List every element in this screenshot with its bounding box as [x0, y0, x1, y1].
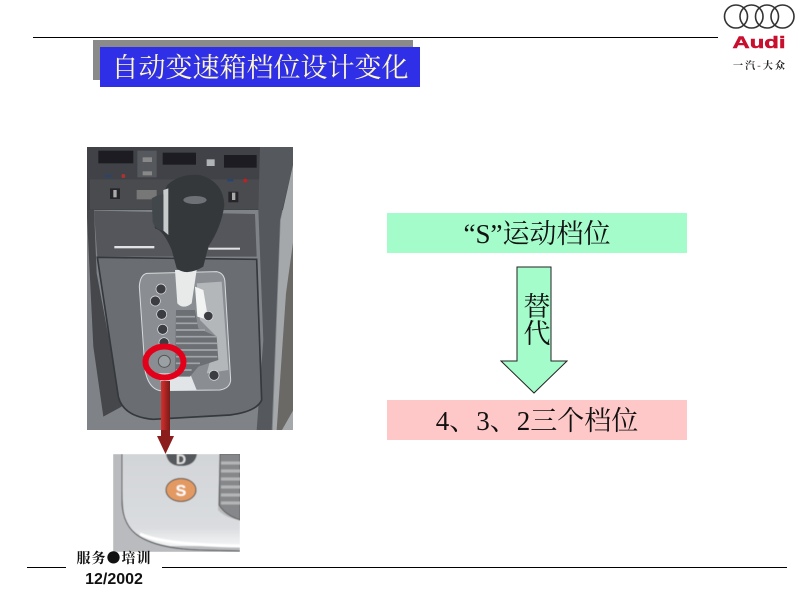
- title: [93, 40, 420, 87]
- red arrow shaft: [161, 381, 170, 430]
- gear dots: [150, 284, 219, 380]
- footer: service training label: 12/2002: [85, 571, 143, 588]
- logo: Audi 一汽-大众: 一汽-大众: [733, 57, 785, 72]
- arrow: replaced by: [500, 266, 568, 394]
- footer: service training label: 服务●培训: [76, 548, 152, 568]
- logo: Audi 一汽-大众: [724, 4, 795, 72]
- left edge: [87, 210, 122, 417]
- footer: service training label: [76, 548, 152, 588]
- knob: [154, 175, 224, 272]
- photo: gear shifter with S position circled: [87, 147, 293, 430]
- logo: Audi 一汽-大众: Audi: [732, 33, 786, 52]
- shaft: [175, 270, 197, 307]
- top console: [87, 147, 293, 210]
- arrow: replaced by: 代: [524, 312, 550, 351]
- ribbed slot: [175, 310, 218, 377]
- panel: 4, 3, 2 positions: [387, 400, 687, 440]
- red circle: [146, 346, 184, 378]
- right side dark and light trim: [257, 147, 293, 430]
- lower console panel: [97, 257, 262, 419]
- panel: S sport position: “S”运动档位: [464, 219, 610, 249]
- panel: S sport position: [387, 213, 687, 253]
- arrow: red pointer to inset: [157, 430, 174, 454]
- metal gate plate: [139, 272, 231, 391]
- inset: S button close-up: S: [176, 483, 187, 500]
- inset: S button close-up: [113, 454, 240, 552]
- arrow: replaced by: 替: [524, 285, 550, 324]
- panel: 4, 3, 2 positions: 4、3、2三个档位: [436, 406, 638, 436]
- tray panel: [94, 211, 257, 257]
- title: 自动变速箱档位设计变化: [112, 53, 408, 83]
